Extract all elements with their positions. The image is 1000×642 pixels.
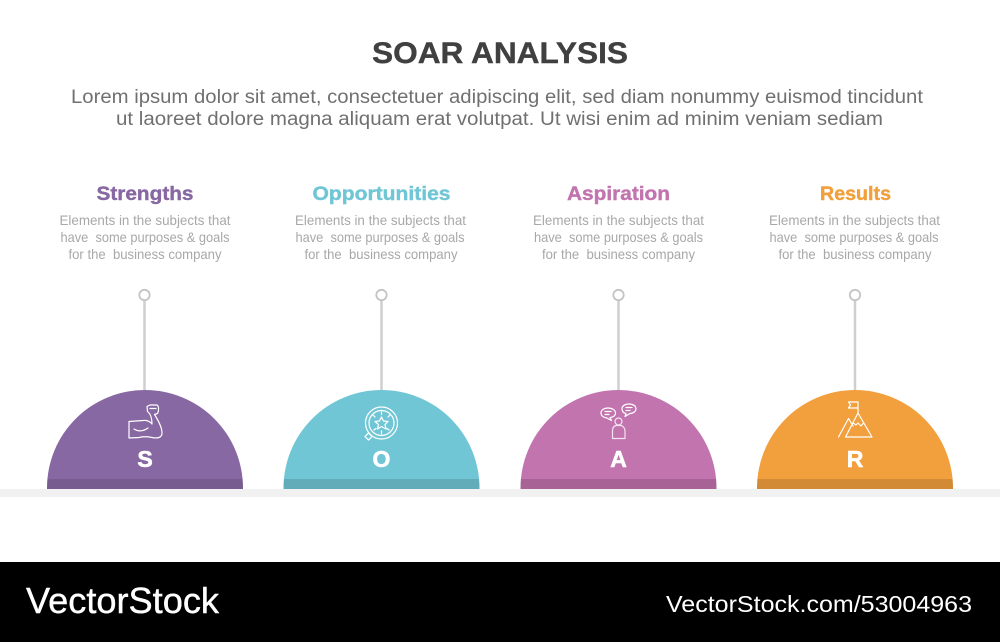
panel: aspiration	[520, 184, 716, 489]
subtitle: Lorem ipsum dolor sit amet, consectetuer adipiscing elit, sed diam nonummy euismod tincidunt	[71, 87, 924, 108]
letter: A: A	[610, 446, 627, 472]
heading: results: Results	[820, 184, 891, 205]
connector: strengths	[139, 290, 150, 391]
subtitle	[71, 87, 924, 130]
floor bar	[0, 489, 1000, 497]
connector: opportunities	[376, 290, 387, 391]
icon: magnifier with star	[365, 407, 398, 440]
description: strengths: have some purposes & goals	[60, 229, 230, 245]
letter: R: R	[847, 446, 864, 472]
connector: results	[850, 290, 860, 391]
footer url: VectorStock.com/53004963	[666, 591, 972, 617]
description: aspiration: have some purposes & goals	[534, 229, 703, 245]
heading: aspiration: Aspiration	[567, 184, 670, 205]
letter: O: O	[373, 446, 390, 472]
description: results: have some purposes & goals	[770, 229, 938, 245]
semicircle: strengths	[47, 390, 243, 489]
description: aspiration: for the business company	[542, 246, 695, 262]
footer bar	[0, 562, 1000, 642]
semicircle: opportunities	[284, 390, 480, 489]
description: results	[769, 212, 940, 262]
description: strengths: Elements in the subjects that	[60, 212, 231, 228]
heading: strengths: Strengths	[96, 184, 194, 205]
icon: mountain with flag	[838, 402, 872, 437]
description: opportunities	[295, 212, 466, 262]
letter: S: S	[137, 446, 153, 472]
description: opportunities: for the business company	[304, 246, 458, 262]
panel: results	[757, 184, 953, 489]
title: SOAR ANALYSIS	[372, 37, 628, 70]
description: opportunities: Elements in the subjects that	[295, 212, 466, 228]
description: results: Elements in the subjects that	[769, 212, 940, 228]
description: strengths: for the business company	[68, 246, 222, 262]
panel: opportunities	[284, 184, 480, 489]
description: aspiration	[533, 212, 704, 262]
icon: flexed arm	[129, 405, 162, 438]
heading: opportunities: Opportunities	[312, 184, 450, 205]
semicircle: aspiration	[520, 390, 716, 489]
semicircle: results	[757, 390, 953, 489]
description: strengths	[60, 212, 231, 262]
icon: person with speech bubbles	[601, 404, 636, 438]
description: results: for the business company	[778, 246, 932, 262]
description: opportunities: have some purposes & goals	[296, 229, 464, 245]
description: aspiration: Elements in the subjects that	[533, 212, 704, 228]
connector: aspiration	[613, 290, 624, 391]
panel: strengths	[47, 184, 243, 489]
subtitle: ut laoreet dolore magna aliquam erat volutpat. Ut wisi enim ad minim veniam sediam	[116, 109, 883, 130]
footer logo: VectorStock	[26, 580, 220, 621]
